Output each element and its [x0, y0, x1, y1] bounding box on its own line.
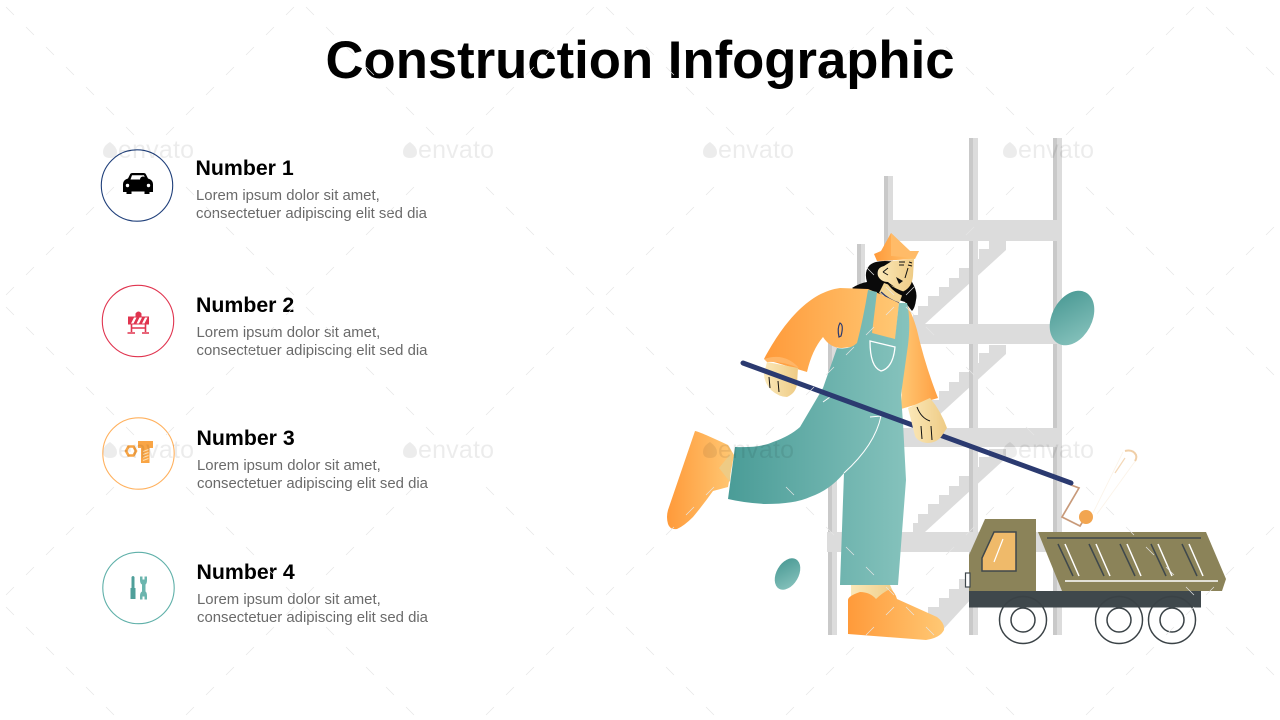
front foot — [848, 589, 944, 640]
item 1 — [101, 150, 428, 222]
watermark overlay: envato — [418, 436, 494, 464]
heading 3: Number 3 — [196, 426, 295, 450]
back foot — [667, 431, 734, 529]
overalls — [728, 290, 909, 585]
icon: bolt and nut — [103, 418, 174, 489]
item 2 — [102, 285, 428, 359]
back ankle — [719, 452, 732, 482]
description 1: consectetuer adipiscing elit sed dia — [196, 206, 428, 222]
icon: screwdriver and wrench — [103, 552, 174, 624]
description 2: Lorem ipsum dolor sit amet, — [196, 325, 380, 341]
hard hat — [874, 233, 919, 261]
icon: car — [101, 150, 173, 221]
left hand — [764, 357, 799, 397]
heading 2: Number 2 — [196, 293, 294, 317]
heading 1: Number 1 — [196, 156, 294, 180]
illustration: dump truck — [966, 519, 1226, 644]
roller pole — [743, 363, 1071, 483]
watermark overlay: envato — [418, 136, 494, 164]
illustration: paint roller — [1062, 450, 1136, 526]
watermark overlay: envato — [118, 136, 194, 164]
right sleeve — [901, 302, 938, 409]
hair — [852, 261, 916, 311]
heading 4: Number 4 — [196, 560, 295, 584]
description 4: consectetuer adipiscing elit sed dia — [197, 610, 429, 626]
illustration: scaffold with stairs — [827, 138, 1062, 635]
description 2: consectetuer adipiscing elit sed dia — [196, 343, 428, 359]
illustration: worker — [667, 233, 1071, 640]
watermark overlay: envato — [118, 436, 194, 464]
shirt and raised arm — [764, 288, 899, 372]
watermark overlay: envato — [1018, 136, 1094, 164]
watermark overlay: envato — [1018, 436, 1094, 464]
description 3: consectetuer adipiscing elit sed dia — [197, 476, 429, 492]
neck — [879, 283, 904, 304]
watermark overlay: envato — [718, 136, 794, 164]
description 3: Lorem ipsum dolor sit amet, — [197, 458, 381, 474]
description 1: Lorem ipsum dolor sit amet, — [196, 188, 380, 204]
list: numbered items — [101, 150, 429, 626]
decorative leaf: small — [769, 554, 806, 594]
description 4: Lorem ipsum dolor sit amet, — [197, 592, 381, 608]
overall details — [870, 341, 895, 371]
icon: road barrier — [102, 285, 174, 357]
decorative leaf: large — [1041, 283, 1103, 353]
watermark overlay: envato — [718, 436, 794, 464]
title: Construction Infographic — [326, 31, 954, 90]
front ankle — [851, 585, 897, 600]
face — [878, 259, 914, 303]
item 4 — [103, 552, 429, 626]
item 3 — [103, 418, 429, 492]
right hand — [908, 398, 947, 443]
